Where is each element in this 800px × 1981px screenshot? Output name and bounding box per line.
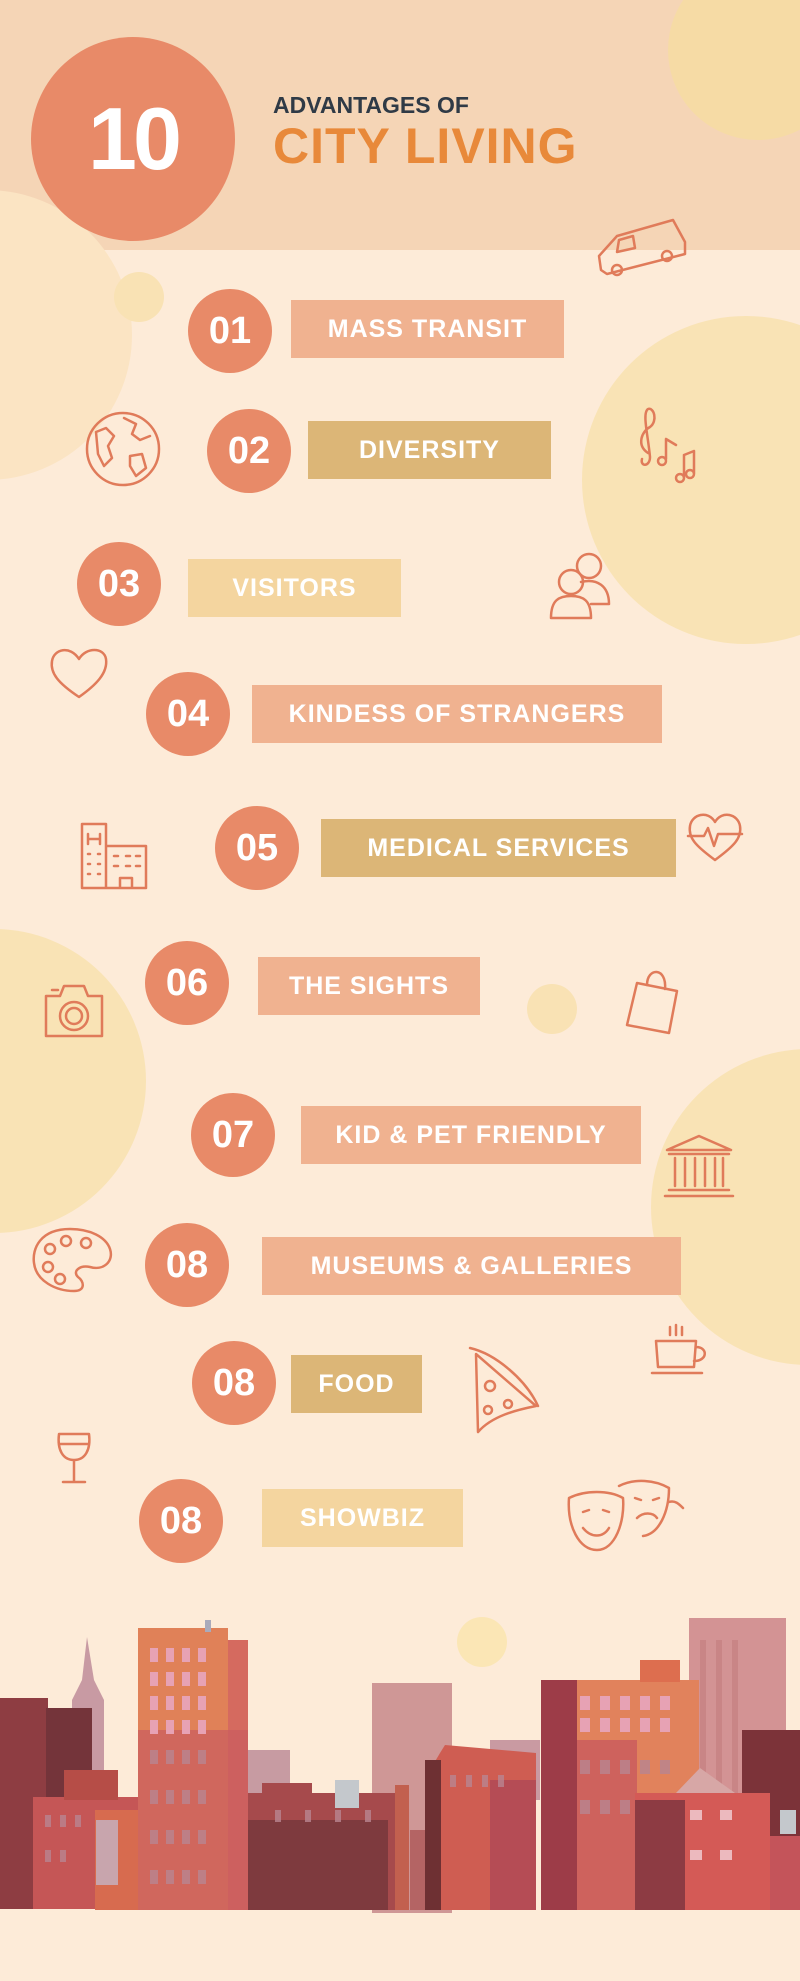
item 08 showbiz [139, 1479, 463, 1563]
item 07: KID & PET FRIENDLY [335, 1121, 607, 1149]
icon: wine glass [57, 1432, 91, 1484]
item 05: MEDICAL SERVICES [367, 834, 630, 862]
item 01: 01 [209, 310, 251, 352]
icon: bag [626, 970, 678, 1034]
item 08 museums: 08 [166, 1244, 208, 1286]
item 06: 06 [166, 962, 208, 1004]
item 07 [191, 1093, 641, 1177]
icon: globe [86, 412, 160, 486]
item 08 showbiz: SHOWBIZ [300, 1504, 425, 1532]
item 08 food: 08 [213, 1362, 255, 1404]
title: ADVANTAGES OF [273, 92, 469, 118]
item 07: 07 [212, 1114, 254, 1156]
item 08 food: FOOD [318, 1370, 395, 1398]
icon: camera [44, 984, 104, 1038]
item 02: 02 [228, 430, 270, 472]
icon: music notes [640, 408, 696, 484]
icon: bank [664, 1134, 734, 1198]
item 01 [188, 289, 564, 373]
item 02 [207, 409, 551, 493]
icon: hospital [80, 822, 148, 890]
icon: heart [50, 648, 108, 698]
icon: van [598, 218, 686, 276]
item 03: 03 [98, 563, 140, 605]
icon: pizza [468, 1346, 540, 1434]
item 04: 04 [167, 693, 209, 735]
icon: people [550, 552, 610, 620]
icon: coffee cup [650, 1324, 706, 1374]
item 01: MASS TRANSIT [328, 315, 527, 343]
item 08 museums [145, 1223, 681, 1307]
item 08 showbiz: 08 [160, 1500, 202, 1542]
item 06: THE SIGHTS [289, 972, 449, 1000]
icon: heart pulse [686, 814, 744, 862]
item 05 [215, 806, 676, 890]
title badge [31, 37, 235, 241]
title [273, 92, 578, 174]
title: CITY LIVING [273, 118, 578, 174]
icon: palette [32, 1228, 112, 1292]
item 04 [146, 672, 662, 756]
item 02: DIVERSITY [359, 436, 500, 464]
item 03: VISITORS [232, 574, 357, 602]
skyline [0, 1618, 800, 1913]
item 06 [145, 941, 480, 1025]
item 03 [77, 542, 401, 626]
icon: theatre masks [568, 1480, 684, 1552]
item 04: KINDESS OF STRANGERS [289, 700, 625, 728]
item 08 food [192, 1341, 422, 1425]
item 05: 05 [236, 827, 278, 869]
title badge: 10 [88, 89, 178, 188]
item 08 museums: MUSEUMS & GALLERIES [311, 1252, 632, 1280]
